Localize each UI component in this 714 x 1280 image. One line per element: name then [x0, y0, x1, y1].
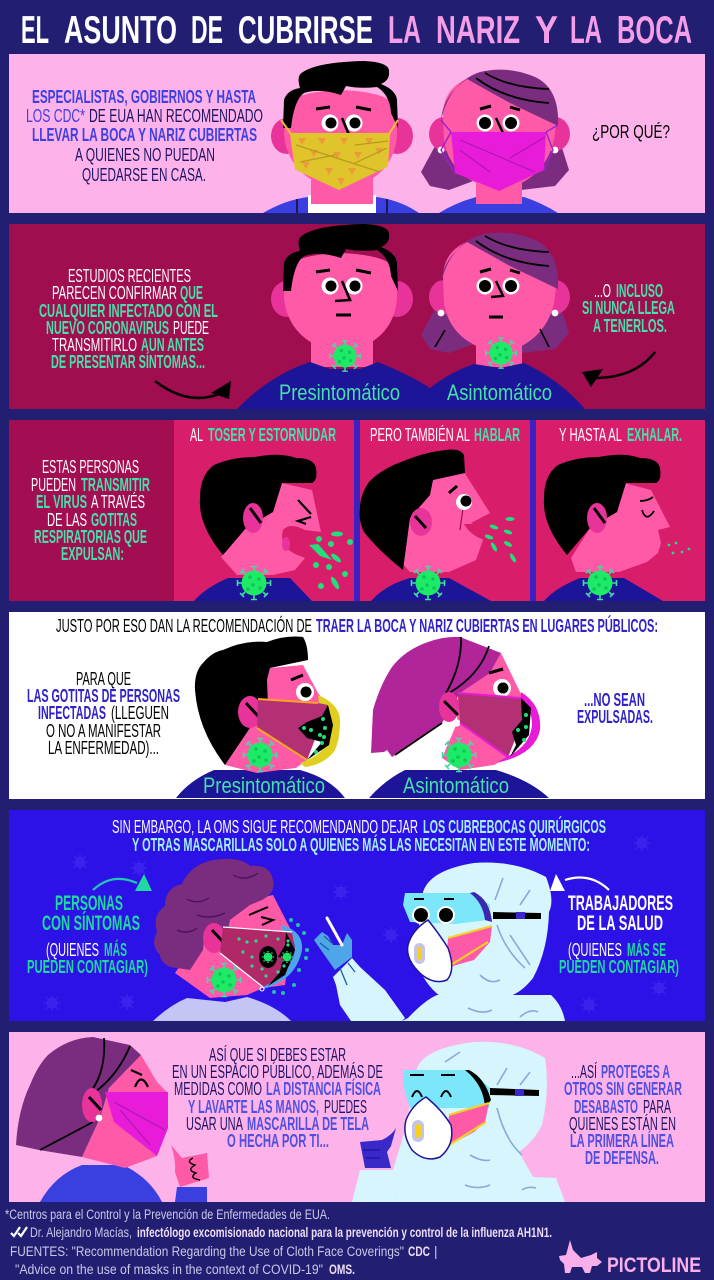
text: these people [31, 456, 150, 564]
text: public space advice: MEDIDAS COMO [174, 1078, 262, 1099]
panel: presymptomatic and asymptomatic [9, 224, 705, 409]
heading: surgical masks [112, 816, 606, 855]
text: health workers [559, 892, 679, 977]
title: CUBRIRSE [238, 9, 373, 52]
text: people with symptoms: MÁS [104, 939, 127, 960]
health worker [402, 863, 565, 1021]
text: recent studies: AUN ANTES [141, 334, 204, 355]
shoulders with labels: Presintomático [279, 380, 400, 405]
arrow: teal to symptomatic person [93, 874, 152, 891]
droplets: talking [484, 517, 517, 563]
man in profile with mask: Presintomático [203, 773, 325, 798]
text: these people: PUEDEN [31, 474, 76, 495]
text: recent studies: PUEDE [173, 317, 209, 338]
text: protect others: PARA [643, 1096, 671, 1117]
footer credits and sources: *Centros para el Control y la Prevención de Enfermedades de EUA. [5, 1207, 330, 1222]
heading: exhaling: Y HASTA AL [559, 424, 622, 445]
text: or never develops [582, 280, 675, 336]
text: these people: GOTITAS [91, 509, 137, 530]
text: not expelled: ...NO SEAN [584, 689, 645, 710]
text: specialists recommend: ESPECIALISTAS, GOBIERNOS Y HASTA [32, 86, 256, 107]
text: specialists recommend: LOS CDC* [26, 105, 85, 126]
person exhaling [544, 455, 670, 601]
title: NARIZ [436, 9, 520, 52]
title: Y [535, 9, 558, 52]
text: so that droplets: INFECTADAS [38, 702, 106, 723]
text: recent studies: CUALQUIER INFECTADO CON EL [39, 300, 218, 321]
text: recent studies: TRANSMITIRLO [52, 334, 137, 355]
text: these people: EL VIRUS [36, 491, 87, 512]
man wearing yellow mask [263, 61, 419, 213]
woman in profile with mask: Asintomático [403, 773, 509, 798]
text: protect others: ...ASÍ [571, 1061, 597, 1082]
text: these people: A TRAVÉS [91, 491, 145, 512]
shoulders with labels: Asintomático [447, 380, 552, 405]
text: or never develops: A TENERLOS. [593, 315, 667, 336]
text: protect others: DE DEFENSA. [585, 1147, 659, 1168]
text: public space advice: USAR UNA [186, 1113, 243, 1134]
text: people with symptoms: PUEDEN CONTAGIAR) [27, 956, 148, 977]
title: EL [21, 9, 49, 52]
footer credits and sources: infectólogo excomisionado nacional para la prevención y control de la influenza AH1N1. [137, 1225, 552, 1240]
heading: surgical masks: SIN EMBARGO, LA OMS SIGUE RECOMENDANDO DEJAR [112, 816, 418, 837]
text: recent studies: NUEVO CORONAVIRUS [46, 317, 169, 338]
text: so that droplets: (LLEGUEN [111, 702, 169, 723]
text: recent studies: DE PRESENTAR SÍNTOMAS... [51, 351, 205, 372]
man in profile with mask [176, 637, 345, 798]
icon: pig with rider [559, 1240, 602, 1273]
text: people with symptoms: (QUIENES [46, 939, 99, 960]
text: public space advice: O HECHA POR TI... [227, 1130, 329, 1151]
sick person with mask [153, 859, 309, 1021]
text: recent studies: ESTUDIOS RECIENTES [68, 265, 191, 286]
text: recent studies: PARECEN CONFIRMAR [52, 282, 177, 303]
text: public space advice: PUEDES [324, 1096, 367, 1117]
droplets: exhaling [668, 542, 690, 554]
text: recent studies: QUE [180, 282, 203, 303]
panel: wear a covering [9, 612, 705, 799]
text: specialists recommend: QUEDARSE EN CASA. [82, 164, 206, 185]
text: protect others [564, 1061, 682, 1168]
shoulders with labels [237, 338, 585, 409]
logo: Pictoline [559, 1240, 701, 1277]
text: public space advice [172, 1044, 383, 1151]
woman asymptomatic [421, 233, 570, 367]
person coughing [194, 455, 321, 601]
text: not expelled: EXPULSADAS. [577, 706, 653, 727]
text: these people: DE LAS [47, 509, 87, 530]
panel: WHO recommendation [9, 810, 705, 1021]
text: why: ¿POR QUÉ? [592, 121, 670, 142]
text: so that droplets: LA ENFERMEDAD)... [48, 737, 159, 758]
heading: coughing [190, 424, 336, 445]
heading: talking: HABLAR [474, 424, 520, 445]
footer credits and sources: | [434, 1244, 438, 1259]
text: people with symptoms [27, 892, 148, 977]
footer credits and sources: OMS. [329, 1262, 355, 1277]
text: or never develops: ...O [594, 280, 611, 301]
health worker giving thumbs up [352, 1042, 565, 1202]
arrow: to asymptomatic [582, 352, 655, 387]
text: so that droplets [27, 668, 180, 758]
gloved hand with swab and arm [314, 918, 405, 1021]
icon: double check [11, 1227, 27, 1236]
text: recent studies [39, 265, 218, 372]
text: public space advice: Y LAVARTE LAS MANOS, [188, 1096, 319, 1117]
text: not expelled [577, 689, 653, 727]
arrow: white to health worker [550, 874, 609, 891]
heading: talking: PERO TAMBIÉN AL [370, 424, 470, 445]
title [21, 9, 692, 52]
text: these people: TRANSMITIR [81, 474, 150, 495]
text: these people: EXPULSAN: [61, 543, 124, 564]
panel: recommendation [9, 54, 705, 213]
text: public space advice: EN UN ESPACIO PÚBLICO, ADEMÁS DE [172, 1061, 383, 1082]
man presymptomatic [271, 224, 413, 367]
footer credits and sources: Dr. Alejandro Macías, [30, 1225, 132, 1240]
heading: recommendation: JUSTO POR ESO DAN LA RECOMENDACIÓN DE [56, 615, 312, 636]
footer credits and sources [5, 1207, 552, 1277]
text: protect others: DESABASTO [574, 1096, 638, 1117]
text: people with symptoms: CON SÍNTOMAS [42, 912, 140, 935]
text: so that droplets: O NO A MANIFESTAR [46, 720, 161, 741]
panel: transmission by droplets [9, 420, 705, 601]
text: health workers: DE LA SALUD [577, 912, 663, 935]
droplets: coughing [309, 532, 353, 590]
footer credits and sources: "Advice on the use of masks in the context of COVID-19" [15, 1262, 323, 1277]
text: specialists recommend [26, 86, 263, 185]
text: specialists recommend: A QUIENES NO PUEDAN [75, 144, 215, 165]
text: health workers: MÁS SE [627, 939, 666, 960]
text: public space advice: LA DISTANCIA FÍSICA [266, 1078, 381, 1099]
text: so that droplets: PARA QUE [76, 668, 131, 689]
text: public space advice: MASCARILLA DE TELA [247, 1113, 369, 1134]
person talking [360, 450, 495, 601]
text: so that droplets: LAS GOTITAS DE PERSONAS [27, 685, 180, 706]
text: people with symptoms: PERSONAS [55, 892, 123, 915]
text: these people: RESPIRATORIAS QUE [34, 526, 147, 547]
footer credits and sources: CDC [408, 1244, 430, 1259]
text: health workers: (QUIENES [568, 939, 622, 960]
heading: coughing: TOSER Y ESTORNUDAR [208, 424, 336, 445]
woman with mask giving thumbs up [16, 1037, 209, 1202]
woman wearing magenta mask [421, 70, 570, 213]
arrow: to presymptomatic [155, 381, 231, 399]
title: LA [388, 9, 421, 52]
woman in profile with mask [369, 637, 549, 798]
title: LA [570, 9, 602, 52]
text: specialists recommend: LLEVAR LA BOCA Y NARIZ CUBIERTAS [32, 124, 257, 145]
heading: coughing: AL [190, 424, 203, 445]
text: these people: ESTAS PERSONAS [42, 456, 139, 477]
footer credits and sources: FUENTES: "Recommendation Regarding the Use of Cloth Face Coverings" [10, 1244, 404, 1259]
text: public space advice: ASÍ QUE SI DEBES ESTAR [209, 1044, 346, 1065]
text: specialists recommend: DE EUA HAN RECOMENDADO [89, 105, 263, 126]
panel: protect others [9, 1032, 705, 1202]
title: ASUNTO [64, 9, 177, 52]
text: or never develops: INCLUSO [616, 280, 663, 301]
title: DE [191, 9, 223, 52]
